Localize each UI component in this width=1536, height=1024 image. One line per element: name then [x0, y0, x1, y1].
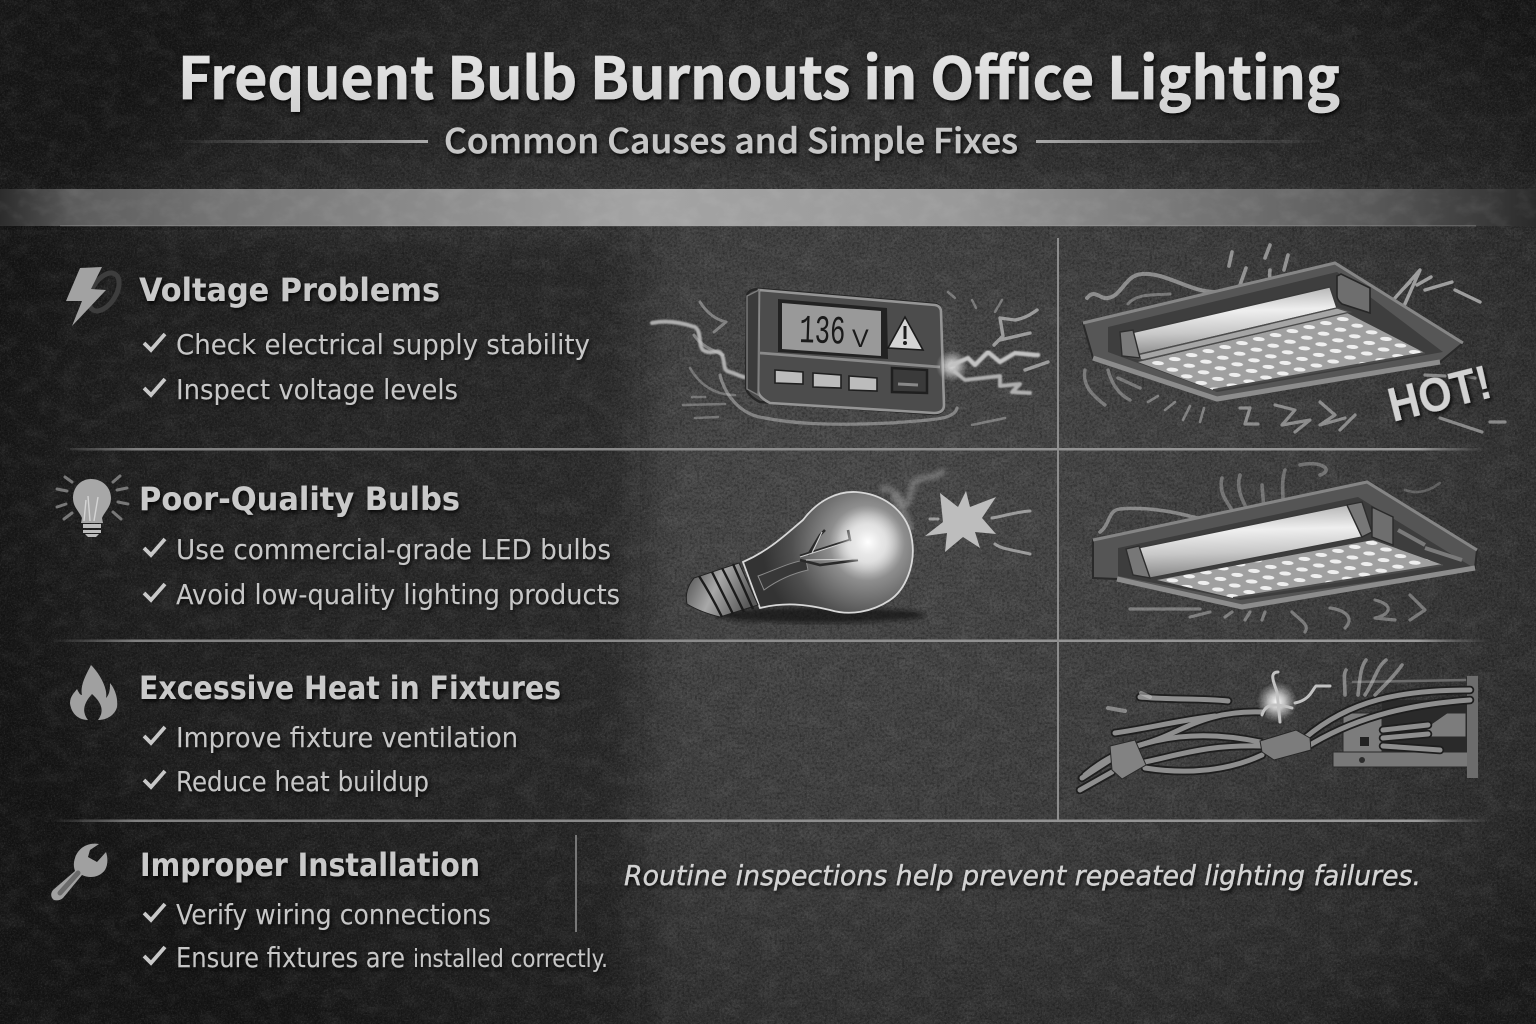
heading: poor-quality bulbs: Poor-Quality Bulbs [139, 480, 460, 518]
meter display: V [852, 325, 869, 353]
check item: heat buildup: Reduce heat buildup [176, 766, 429, 798]
icon: flame [70, 665, 117, 720]
wisps [1100, 464, 1440, 632]
icon: wrench [51, 844, 107, 900]
bracket [1372, 507, 1393, 545]
spark burst [925, 491, 996, 552]
callout: routine inspections: Routine inspections help prevent repeated lighting failures. [624, 860, 1421, 892]
title: Frequent Bulb Burnouts in Office Lighting [178, 32, 1340, 116]
smoke [880, 470, 945, 505]
spark [1108, 672, 1330, 722]
meter display: 136 [799, 310, 846, 357]
glow [836, 510, 900, 574]
check item: supply stability: Check electrical supply stability [176, 329, 590, 361]
illustration: wiring [1080, 660, 1478, 790]
panel: improper installation [51, 844, 608, 974]
check item: ventilation: Improve fixture ventilation [176, 722, 518, 754]
filament [800, 530, 858, 565]
panel: poor-quality bulbs [57, 476, 620, 611]
illustration: burnt bulb [686, 470, 1030, 623]
heat wisps [1084, 245, 1505, 432]
fixture body [1083, 263, 1463, 399]
connectors [1110, 740, 1146, 779]
warning triangle [888, 317, 923, 350]
header band [0, 189, 1536, 226]
check item: installed correctly: Ensure fixtures are [176, 942, 405, 974]
HOT label: HOT! [1383, 356, 1497, 433]
check item: wiring connections: Verify wiring connections [176, 899, 491, 931]
electric arcs right [936, 292, 1048, 425]
glass globe [743, 492, 913, 613]
heading: excessive heat: Excessive Heat in Fixtures [139, 669, 561, 707]
meter body [746, 289, 944, 414]
electric arcs left [652, 302, 957, 424]
panel: excessive heat [70, 665, 561, 798]
shadow [715, 607, 925, 623]
meter buttons [775, 368, 927, 393]
body [1093, 482, 1477, 607]
panel [1157, 540, 1443, 598]
tube [1128, 505, 1362, 578]
check item: installed correctly [144, 942, 608, 974]
illustration: second fixture [1093, 464, 1477, 632]
heading: improper installation: Improper Installation [140, 846, 480, 884]
check item: voltage levels: Inspect voltage levels [176, 374, 458, 406]
check item: installed correctly: installed correctly. [413, 944, 608, 973]
frayed wires [1344, 660, 1402, 695]
spark wisps [930, 511, 1030, 554]
outlet plate [1333, 676, 1478, 778]
icon: light bulb [57, 476, 128, 537]
heading: voltage problems: Voltage Problems [139, 271, 440, 309]
check item: commercial-grade bulbs: Use commercial-grade LED bulbs [176, 534, 611, 566]
subtitle with side rules: Common Causes and Simple Fixes [444, 114, 1018, 163]
meter display [778, 299, 888, 359]
wire bundle [1080, 690, 1470, 790]
screw base [686, 563, 758, 617]
illustration: voltage meter [652, 289, 1048, 425]
panel: voltage problems [66, 267, 590, 406]
light panel [1138, 313, 1425, 390]
subtitle with side rules [170, 114, 1326, 163]
grid lines [50, 238, 1490, 932]
icon: lightning bolt [66, 267, 125, 326]
end bracket [1337, 274, 1370, 313]
check item: avoid low quality: Avoid low-quality lighting products [176, 579, 620, 611]
glass stem [758, 560, 808, 590]
fluorescent tube [1122, 287, 1337, 357]
illustration: hot fixture [1083, 245, 1505, 433]
